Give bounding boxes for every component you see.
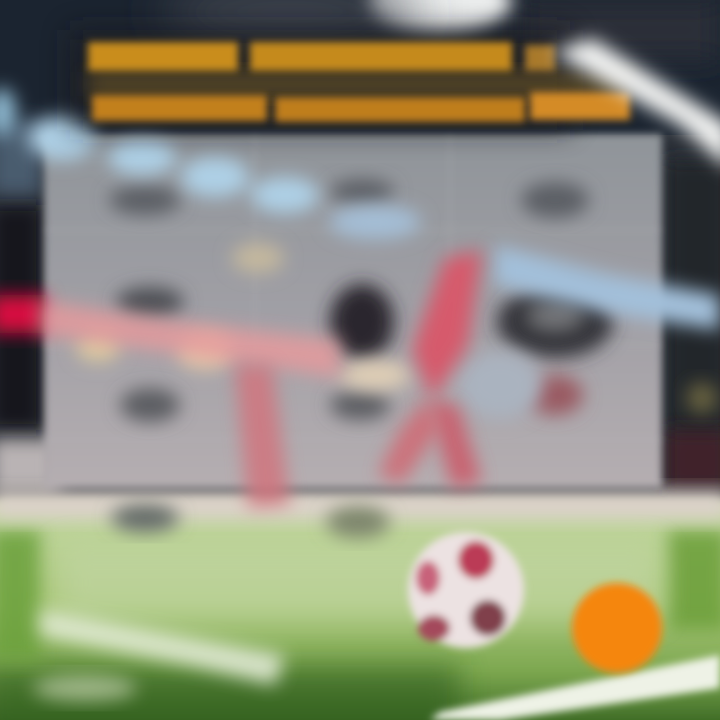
panel cell: dark icon middle row [116,284,613,360]
stadium lights: top-right beam [552,38,720,170]
football [408,532,524,648]
pitch [0,490,720,720]
title: illegible orange heading bars [70,30,630,130]
panel cell: grid lines [44,134,662,490]
red streak and player figure [0,250,482,508]
main grey grid panel [44,134,662,490]
blue light band across the panel [0,88,720,330]
panel cell: pale accents [76,243,542,419]
pitch-side shapes and white lines [33,504,720,720]
panel cell: dark icon top row [109,179,589,218]
icon: orange circle badge [572,583,662,673]
panel cell: dark icon bottom row [120,375,583,422]
